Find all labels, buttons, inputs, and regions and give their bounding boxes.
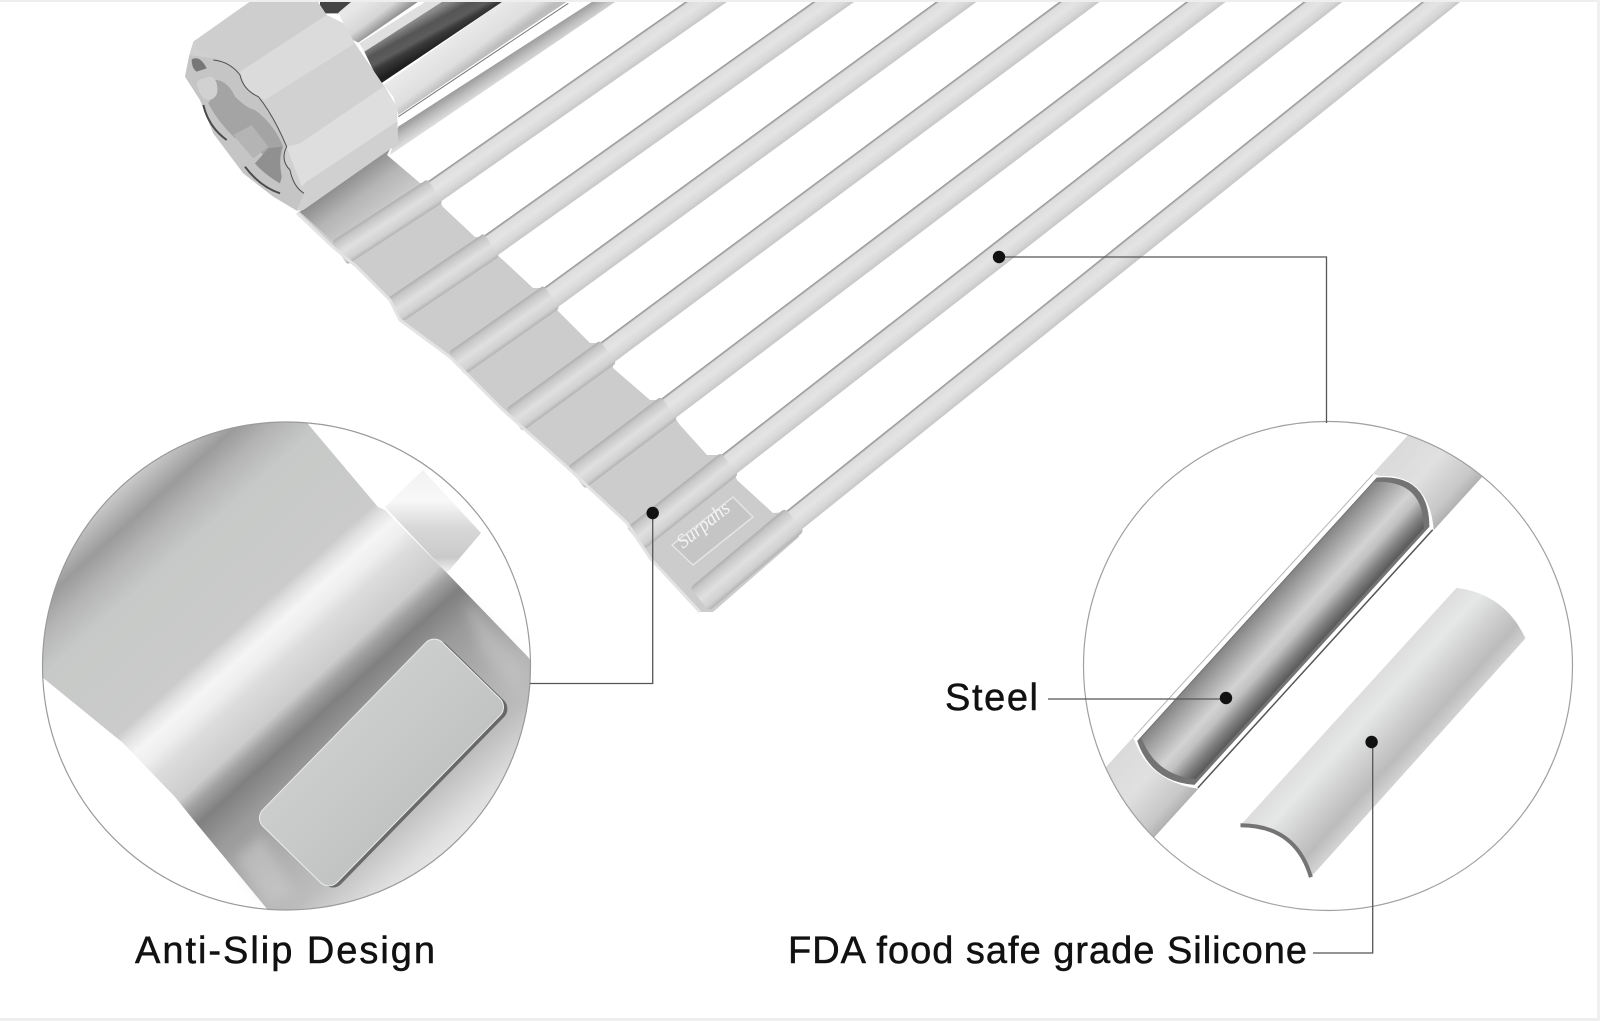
label: FDA silicone: FDA food safe grade Silicone	[788, 930, 1307, 972]
end face rim	[185, 55, 304, 211]
middle panel	[265, 43, 383, 143]
shaded underside fading to white	[390, 1, 617, 155]
steel core rim	[1137, 477, 1430, 785]
tube cutaway	[1133, 474, 1434, 789]
centre bar	[233, 125, 268, 158]
zoomed band surface	[43, 422, 530, 910]
second tube	[383, 0, 569, 115]
left slit	[203, 105, 227, 140]
groove lightening upper right	[468, 610, 518, 677]
top panel	[193, 0, 327, 72]
light stripe	[359, 0, 445, 52]
band outer lip	[297, 213, 700, 612]
steel core	[1142, 482, 1424, 779]
rolled section behind collar	[320, 0, 617, 155]
collar silhouette	[185, 0, 398, 211]
clover lobe	[197, 77, 217, 100]
silicone half shell	[1240, 575, 1532, 884]
silicone tube	[1106, 436, 1482, 838]
panel: anti-slip zoom circle	[42, 421, 532, 911]
inner cavity	[208, 80, 283, 183]
upper dark gap	[320, 0, 355, 13]
rolled band end	[185, 0, 398, 211]
brand name: Surpahs	[672, 497, 735, 553]
callout: silicone	[1313, 736, 1378, 953]
anti-slip pad	[255, 633, 512, 894]
band ribs	[332, 179, 804, 611]
band shadow under roll	[300, 135, 420, 244]
upper cutaway edge	[1134, 474, 1373, 737]
zoomed band and rib	[43, 422, 530, 910]
rack rods	[425, 0, 1462, 532]
corner slit	[192, 58, 207, 72]
silicone band	[297, 135, 799, 612]
lower slit	[245, 167, 280, 193]
callout: band to anti-slip circle	[530, 507, 659, 684]
dark seam	[398, 3, 568, 117]
zoomed tube section	[1106, 436, 1526, 878]
lower cutaway edge	[1198, 530, 1433, 788]
cavity shadow	[255, 147, 282, 183]
brand plate	[672, 497, 753, 565]
drying rack product	[185, 0, 1462, 612]
clover outline	[213, 60, 304, 193]
callout: rod to steel circle	[993, 251, 1326, 423]
label: anti-slip design: Anti-Slip Design	[135, 930, 435, 972]
groove lightening lower left	[238, 839, 287, 899]
label: steel: Steel	[945, 677, 1038, 719]
lower panel	[303, 123, 398, 210]
lower ridge	[287, 87, 397, 187]
callout: steel	[1048, 692, 1232, 704]
first tube	[338, 0, 421, 43]
zoomed rod stub	[385, 470, 481, 573]
panel: steel and silicone zoom circle	[1082, 420, 1574, 912]
dark steel gap	[364, 0, 505, 84]
upper ridge	[240, 15, 355, 100]
